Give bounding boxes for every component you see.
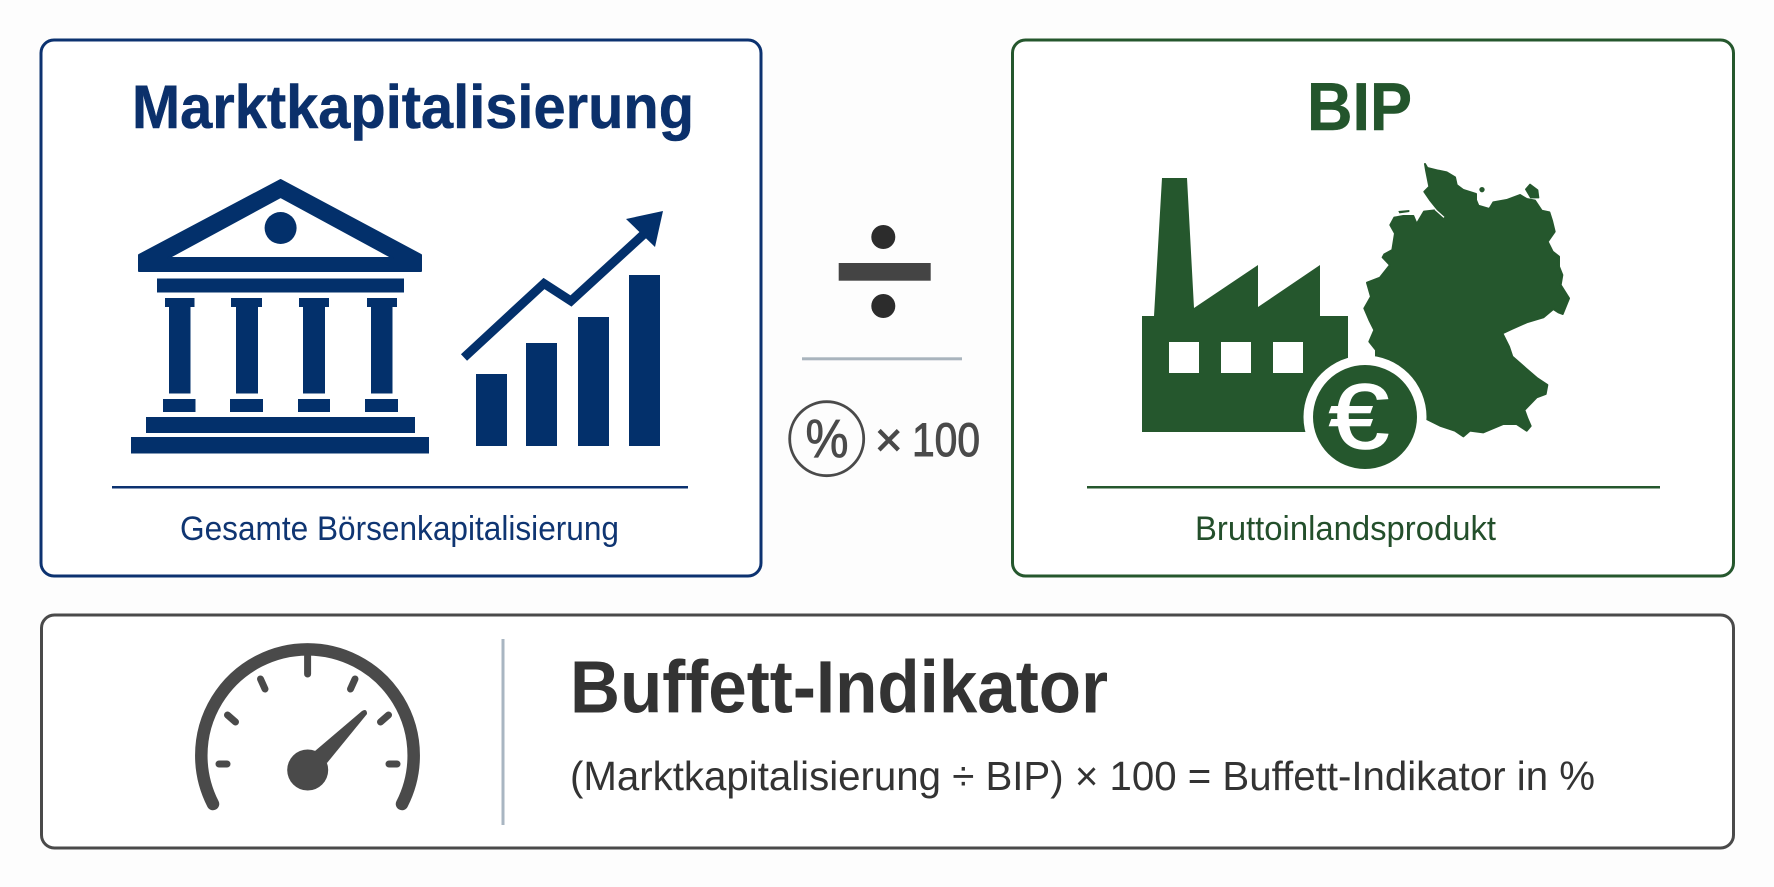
icon: speedometer gauge xyxy=(201,649,414,804)
icon: factory xyxy=(1142,178,1348,432)
panel: Marktkapitalisierung xyxy=(41,40,761,576)
panel: BIP xyxy=(1012,40,1734,576)
divider xyxy=(1087,486,1660,488)
icon: stock exchange building xyxy=(131,180,429,454)
icon: map of Germany xyxy=(1364,164,1569,436)
label: times 100: 100 xyxy=(912,413,980,466)
formula: (Marktkapitalisierung ÷ BIP) × 100 = Buffett-Indikator in % xyxy=(570,753,1595,799)
operator: divide and percent xyxy=(790,225,980,476)
separator line xyxy=(802,357,962,360)
icon: percent in circle xyxy=(790,402,864,476)
panel: Buffett-Indikator result xyxy=(42,615,1734,848)
heading: Marktkapitalisierung: Marktkapitalisierung xyxy=(132,73,694,141)
caption: Bruttoinlandsprodukt: Bruttoinlandsprodukt xyxy=(1195,510,1497,548)
heading: Buffett-Indikator: Buffett-Indikator xyxy=(570,646,1108,728)
panel frame xyxy=(41,40,761,576)
icon: euro coin: € xyxy=(1329,366,1389,468)
label: times 100: × xyxy=(875,413,902,466)
divider xyxy=(112,486,688,488)
heading: BIP: BIP xyxy=(1307,69,1412,145)
icon: division sign xyxy=(839,225,931,318)
caption: Gesamte Börsenkapitalisierung: Gesamte Börsenkapitalisierung xyxy=(180,510,619,548)
vertical divider xyxy=(502,639,504,825)
icon: percent in circle: % xyxy=(806,409,848,469)
icon: rising bar chart with arrow xyxy=(464,211,663,446)
panel frame xyxy=(42,615,1734,848)
panel frame xyxy=(1012,40,1734,576)
icon: euro coin xyxy=(1304,356,1426,478)
